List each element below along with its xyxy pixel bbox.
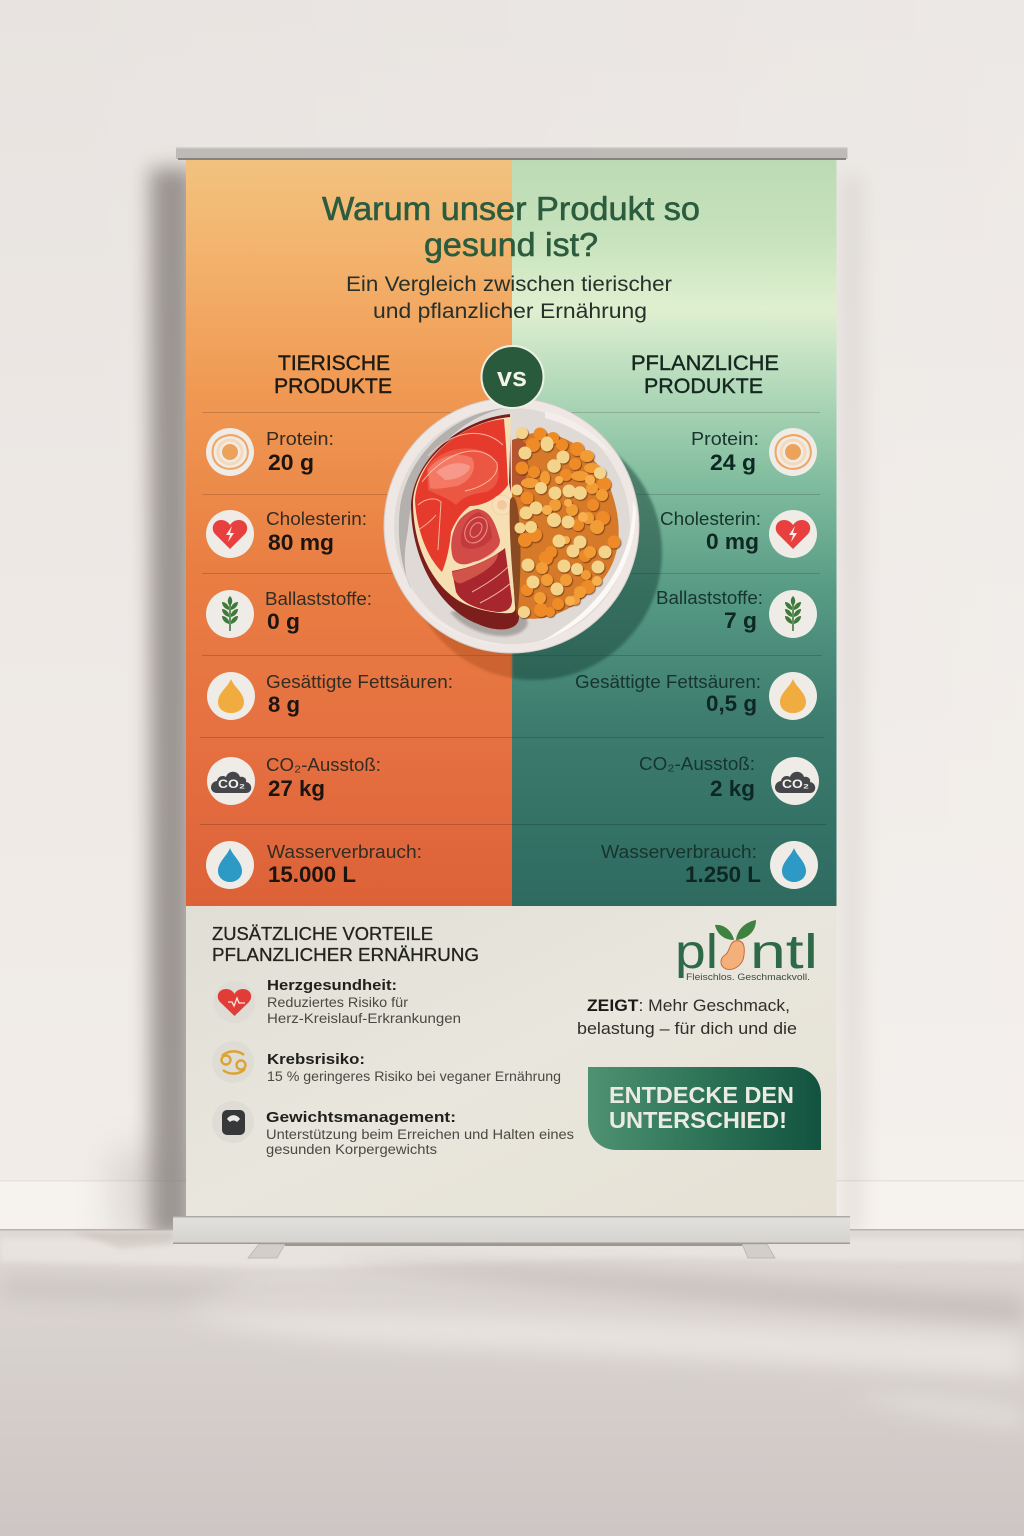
- benefit: cancer risk: [212, 1041, 561, 1084]
- icon: water drop: [206, 841, 254, 889]
- roll-up banner: [186, 160, 836, 1217]
- row: CO2 plant: 2 kg: [710, 776, 755, 801]
- row: cholesterol animal: Cholesterin:: [266, 509, 367, 529]
- call to action button: [588, 1067, 821, 1150]
- row: saturated fat plant: 0,5 g: [706, 691, 757, 716]
- row: fibre plant: Ballaststoffe:: [656, 588, 763, 608]
- row: water animal: Wasserverbrauch:: [267, 842, 422, 862]
- row: protein plant: [691, 428, 817, 476]
- row: cholesterol plant: Cholesterin:: [660, 509, 761, 529]
- logo: pl: [675, 926, 718, 979]
- icon: heart with pulse: [214, 981, 256, 1023]
- row: saturated fat plant: [575, 672, 817, 720]
- logo: [675, 920, 818, 983]
- row: saturated fat animal: Gesättigte Fettsäuren:: [266, 672, 453, 692]
- heading: animal products: TIERISCHE: [278, 352, 390, 375]
- benefit: weight management: [212, 1101, 574, 1157]
- stand base: [173, 1216, 850, 1258]
- row: cholesterol plant: 0 mg: [706, 529, 759, 554]
- banner shadow: [110, 168, 862, 1240]
- VS badge: vs: [497, 362, 527, 392]
- subtitle: und pflanzlicher Ernährung: [373, 300, 647, 323]
- icon: cancer sign: [212, 1041, 254, 1083]
- icon: oil drop: [207, 672, 255, 720]
- icon: wheat: [206, 590, 254, 638]
- icon: scale: [212, 1101, 254, 1143]
- row: water animal: 15.000 L: [268, 862, 356, 887]
- row: water plant: [601, 841, 818, 889]
- panel: bottom area background: [186, 906, 836, 1217]
- floor: [0, 1229, 1024, 1536]
- tagline: belastung – für dich und die: [577, 1019, 797, 1038]
- row: cholesterol plant: [660, 509, 817, 558]
- row: protein animal: 20 g: [268, 450, 314, 475]
- benefit: weight management: Gewichtsmanagement:: [266, 1109, 456, 1126]
- tagline: ZEIGT: Mehr Geschmack,: [587, 996, 790, 1015]
- heading: plant products: PRODUKTE: [644, 375, 763, 398]
- icon: CO2 cloud: [771, 757, 819, 805]
- lower muscle: [451, 509, 500, 564]
- heading: additional benefits: ZUSÄTZLICHE VORTEILE: [212, 924, 433, 944]
- title: gesund ist?: [424, 226, 598, 263]
- benefit: heart health: Herzgesundheit:: [267, 977, 397, 994]
- VS badge: [482, 346, 544, 408]
- icon: heart: [206, 510, 254, 558]
- meat steak: [411, 414, 519, 629]
- row: cholesterol animal: 80 mg: [268, 530, 334, 555]
- icon: CO2 cloud: [207, 757, 255, 805]
- title: [322, 190, 700, 263]
- row: CO2 plant: CO₂-Ausstoß:: [639, 754, 755, 774]
- row: saturated fat animal: [207, 672, 453, 720]
- row: saturated fat animal: 8 g: [268, 692, 300, 717]
- heading: additional benefits: [212, 924, 479, 965]
- heading: animal products: [274, 352, 392, 398]
- icon: water drop: [770, 841, 818, 889]
- benefit: cancer risk: 15 % geringeres Risiko bei veganer Ernährung: [267, 1069, 561, 1084]
- row: CO2 animal: CO₂-Ausstoß:: [266, 755, 381, 775]
- heading: animal products: PRODUKTE: [274, 375, 392, 398]
- row: CO2 animal: 27 kg: [268, 776, 325, 801]
- icon: protein: [769, 428, 817, 476]
- tagline: [577, 996, 797, 1038]
- row: protein plant: Protein:: [691, 429, 759, 449]
- bottom red muscle: [452, 548, 512, 612]
- logo: Fleischlos. Geschmackvoll.: [686, 972, 810, 983]
- row: water plant: 1.250 L: [685, 862, 761, 887]
- row: fibre animal: [206, 589, 372, 638]
- heading: plant products: [631, 352, 779, 398]
- panel: animal products background: [186, 160, 512, 906]
- plate with meat and lentils: [384, 398, 662, 680]
- row: saturated fat plant: Gesättigte Fettsäuren:: [575, 672, 761, 692]
- plate shadow: [425, 453, 663, 681]
- benefit: weight management: gesunden Korpergewichts: [266, 1142, 437, 1157]
- benefit: weight management: Unterstützung beim Erreichen und Halten eines: [266, 1127, 574, 1142]
- row: fibre plant: [656, 588, 817, 638]
- subtitle: [346, 273, 672, 323]
- row: protein plant: 24 g: [710, 450, 756, 475]
- lentils: [510, 427, 620, 619]
- heading: plant products: PFLANZLICHE: [631, 352, 779, 375]
- icon: CO2 cloud: CO₂: [782, 777, 809, 791]
- row: protein animal: [206, 428, 334, 476]
- icon: bean: [721, 941, 744, 969]
- top rail: [176, 147, 848, 160]
- call to action button: UNTERSCHIED!: [609, 1107, 787, 1133]
- row: water plant: Wasserverbrauch:: [601, 842, 757, 862]
- row: fibre plant: 7 g: [724, 608, 757, 633]
- heading: additional benefits: PFLANZLICHER ERNÄHRUNG: [212, 945, 479, 965]
- baseboard: [0, 1180, 1024, 1230]
- benefit: heart health: Reduziertes Risiko für: [267, 995, 409, 1010]
- icon: protein: [206, 428, 254, 476]
- benefit: cancer risk: Krebsrisiko:: [267, 1051, 365, 1068]
- title: Warum unser Produkt so: [322, 190, 700, 227]
- panel: plant products background: [512, 160, 836, 906]
- dividers: [200, 412, 826, 824]
- row: CO2 animal: [207, 755, 381, 805]
- row: CO2 plant: [639, 754, 819, 805]
- row: fibre animal: 0 g: [267, 609, 300, 634]
- row: water animal: [206, 841, 422, 889]
- icon: leaves: [715, 920, 756, 940]
- subtitle: Ein Vergleich zwischen tierischer: [346, 273, 672, 296]
- row: cholesterol animal: [206, 509, 367, 558]
- benefit: heart health: Herz-Kreislauf-Erkrankungen: [267, 1011, 461, 1026]
- logo: ntl: [750, 926, 818, 979]
- call to action button: ENTDECKE DEN: [609, 1082, 794, 1108]
- icon: wheat: [769, 590, 817, 638]
- plate: [384, 398, 639, 653]
- row: protein animal: Protein:: [266, 429, 334, 449]
- icon: CO2 cloud: CO₂: [218, 777, 245, 791]
- icon: heart: [769, 510, 817, 558]
- benefit: heart health: [214, 977, 461, 1026]
- upper red muscle: [415, 419, 508, 572]
- row: fibre animal: Ballaststoffe:: [265, 589, 372, 609]
- icon: oil drop: [769, 672, 817, 720]
